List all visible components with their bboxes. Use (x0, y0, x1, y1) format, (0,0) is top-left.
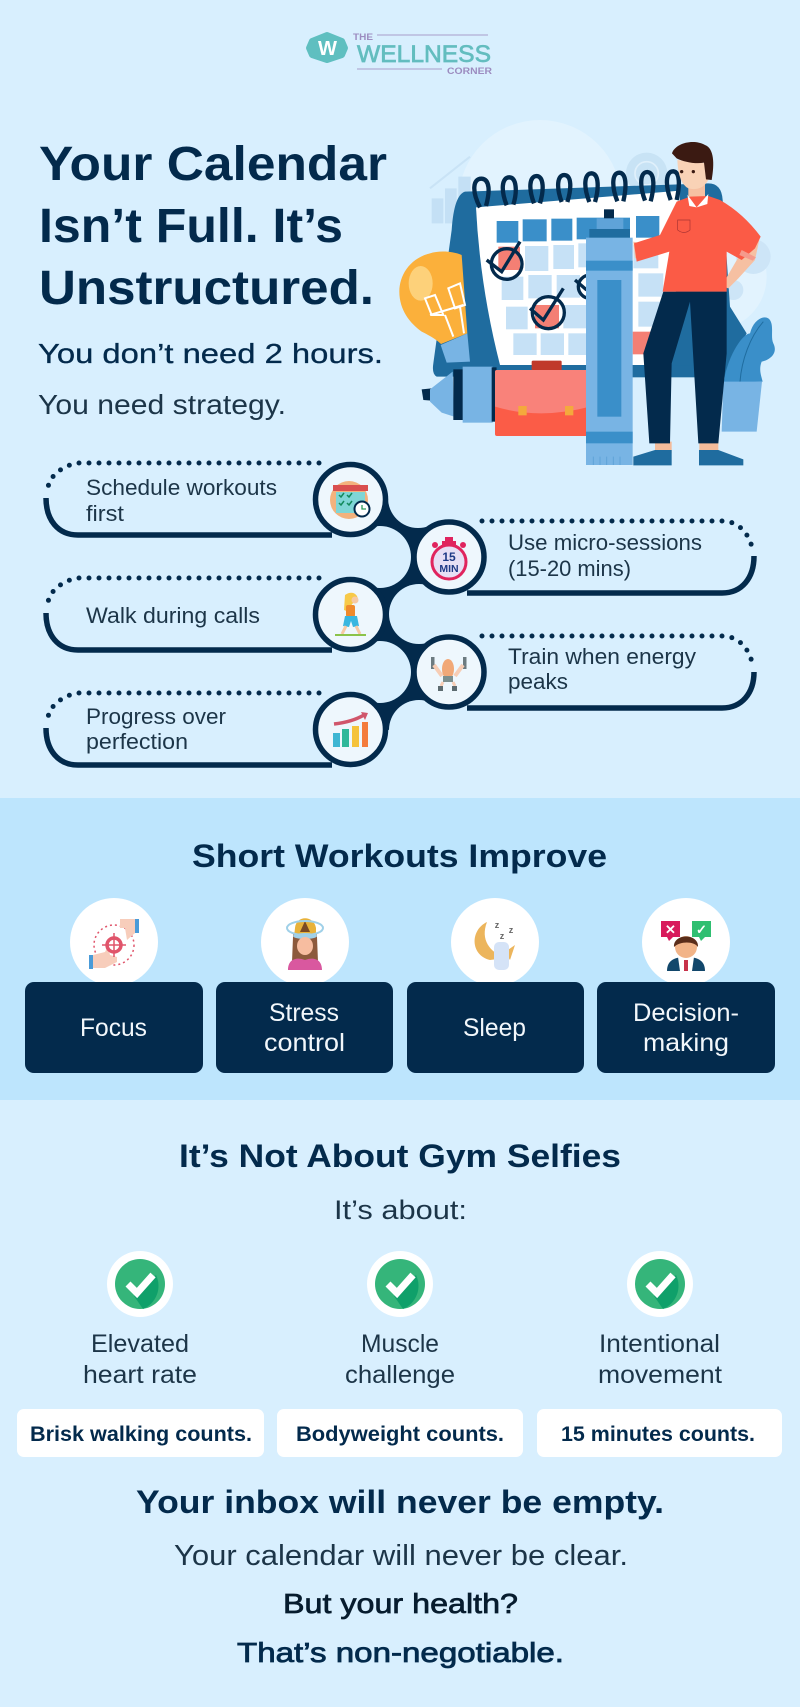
title: Isn’t Full. It’s (39, 200, 343, 253)
icon: decision: ✓ (696, 922, 707, 937)
column: elevated heart rate: heart rate (83, 1361, 197, 1389)
closing text: That’s non-negotiable. (237, 1637, 564, 1668)
icon: sleep: z (500, 931, 505, 941)
column: intentional movement (598, 1251, 722, 1389)
chip: bodyweight (277, 1409, 523, 1457)
column: muscle challenge: Muscle (361, 1330, 439, 1358)
heading: gym selfies: It’s Not About Gym Selfies (179, 1138, 621, 1174)
icon: plant (722, 317, 775, 432)
card: focus: Focus (80, 1014, 147, 1042)
title: Unstructured. (39, 262, 374, 315)
step: schedule workouts first: first (86, 501, 124, 526)
card: sleep (407, 982, 584, 1073)
closing text: Your inbox will never be empty. (136, 1484, 664, 1520)
column: muscle challenge (345, 1251, 455, 1389)
title: Your Calendar (39, 138, 387, 191)
illustration: man with calendar (399, 120, 775, 465)
chip: brisk walking (17, 1409, 264, 1457)
icon: briefcase (495, 361, 590, 436)
column: intentional movement: movement (598, 1361, 722, 1389)
step: micro-sessions: Use micro-sessions (508, 530, 702, 555)
logo: W (318, 38, 337, 60)
subtitle (38, 338, 383, 420)
icon: focus (70, 898, 158, 986)
step: progress over perfection: perfection (86, 729, 188, 754)
step: train when energy peaks (467, 636, 754, 708)
step: walk during calls (46, 578, 332, 650)
icon: 15 minute stopwatch: MIN (439, 563, 459, 575)
card: focus (25, 982, 203, 1073)
icon: 15 minute stopwatch (414, 522, 484, 592)
card: stress control: Stress (269, 999, 339, 1027)
chip: bodyweight: Bodyweight counts. (296, 1423, 504, 1446)
step: train when energy peaks: Train when energy (508, 644, 696, 669)
column: muscle challenge: challenge (345, 1361, 455, 1389)
chip: 15 minutes: 15 minutes counts. (561, 1423, 755, 1446)
logo: THE (353, 32, 373, 42)
step: progress over perfection: Progress over (86, 704, 226, 729)
card: decision-making: Decision- (633, 999, 739, 1027)
step: progress over perfection (46, 693, 332, 765)
card: sleep: Sleep (463, 1014, 526, 1042)
chip: brisk walking: Brisk walking counts. (30, 1423, 252, 1446)
card: decision-making: making (643, 1029, 729, 1057)
icon: weightlifter (414, 637, 484, 707)
text: it's about: It’s about: (334, 1195, 467, 1225)
icon: light bulb (399, 252, 470, 363)
icon: rising bar chart (316, 694, 386, 764)
steps connector (349, 468, 449, 760)
step: schedule workouts first: Schedule workouts (86, 475, 277, 500)
icon: calendar with clock (316, 464, 386, 534)
column: intentional movement: Intentional (599, 1330, 720, 1358)
logo (309, 32, 493, 76)
logo: WELLNESS (357, 41, 491, 68)
closing text: Your calendar will never be clear. (174, 1540, 628, 1572)
icon: large pen (586, 209, 633, 465)
subtitle: You don’t need 2 hours. (38, 338, 383, 369)
panel: short workouts improve (0, 798, 800, 1100)
card: stress control: control (264, 1029, 345, 1057)
chip: 15 minutes (537, 1409, 782, 1457)
man (633, 142, 761, 465)
closing text: But your health? (283, 1588, 518, 1619)
logo: CORNER (447, 66, 493, 76)
step: micro-sessions (467, 521, 754, 593)
icon: marker (422, 367, 497, 423)
card: stress control (216, 982, 393, 1073)
icon: 15 minute stopwatch: 15 (442, 550, 456, 564)
heading: Short Workouts Improve (192, 838, 607, 874)
card: decision-making (597, 982, 775, 1073)
step: train when energy peaks: peaks (508, 669, 568, 694)
column: elevated heart rate (83, 1251, 197, 1389)
subtitle: You need strategy. (38, 389, 286, 420)
icon: decision (642, 898, 730, 986)
icon: decision: ✕ (665, 922, 676, 937)
calendar (433, 171, 747, 377)
closing text (136, 1484, 664, 1668)
step: schedule workouts first (46, 463, 332, 535)
column: elevated heart rate: Elevated (91, 1330, 189, 1358)
icon: sleep: z (509, 925, 514, 935)
icon: sleep: z (495, 920, 500, 930)
icon: walker (316, 580, 386, 650)
title (39, 138, 387, 315)
icon: stress (261, 898, 349, 986)
step: walk during calls: Walk during calls (86, 603, 260, 628)
icon: sleep (451, 898, 539, 986)
step: micro-sessions: (15-20 mins) (508, 556, 631, 581)
